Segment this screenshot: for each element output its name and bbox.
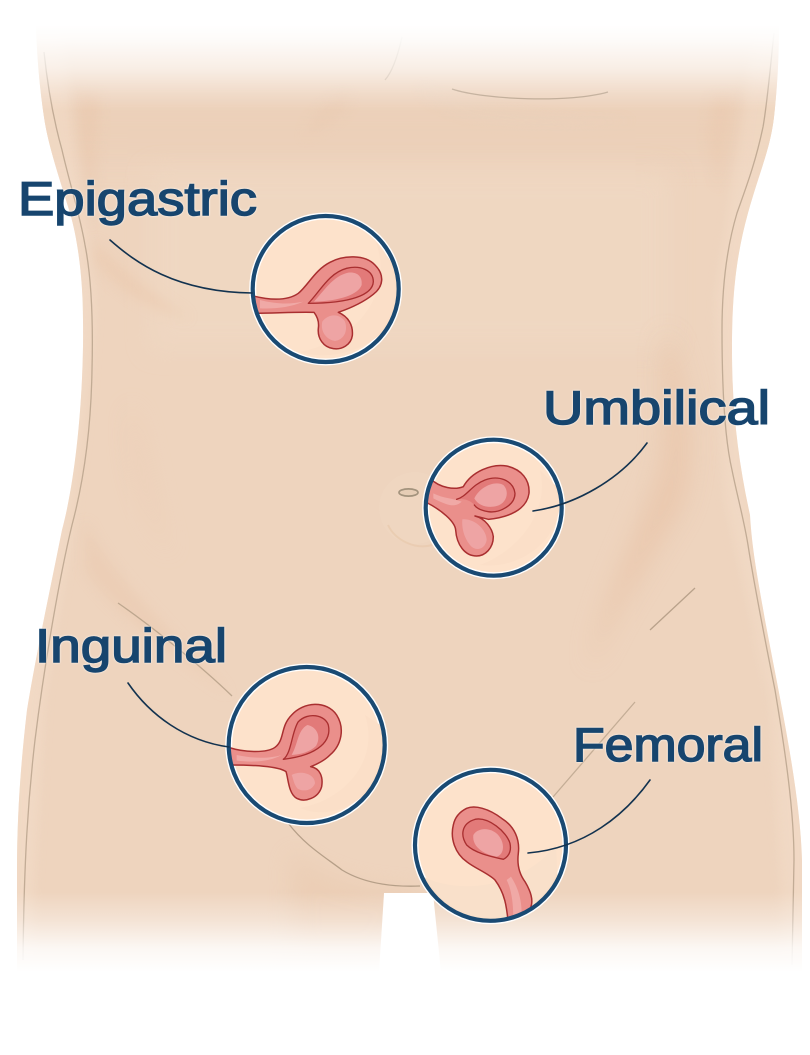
leader line: femoral — [528, 780, 650, 853]
circle: epigastric hernia — [250, 216, 405, 362]
label: Inguinal: Inguinal — [35, 619, 227, 672]
navel — [379, 472, 451, 546]
circle: femoral hernia — [415, 770, 566, 930]
leader line: inguinal — [128, 683, 229, 747]
leader line: umbilical — [533, 443, 647, 511]
leader line: epigastric — [110, 240, 252, 293]
label: Umbilical: Umbilical — [543, 381, 770, 434]
circle: inguinal hernia — [227, 667, 388, 823]
top fade of torso — [0, 20, 810, 110]
bottom fade of torso — [0, 892, 810, 974]
circle: umbilical hernia — [425, 440, 562, 576]
label: Epigastric: Epigastric — [18, 172, 257, 225]
label: Femoral: Femoral — [573, 718, 763, 771]
